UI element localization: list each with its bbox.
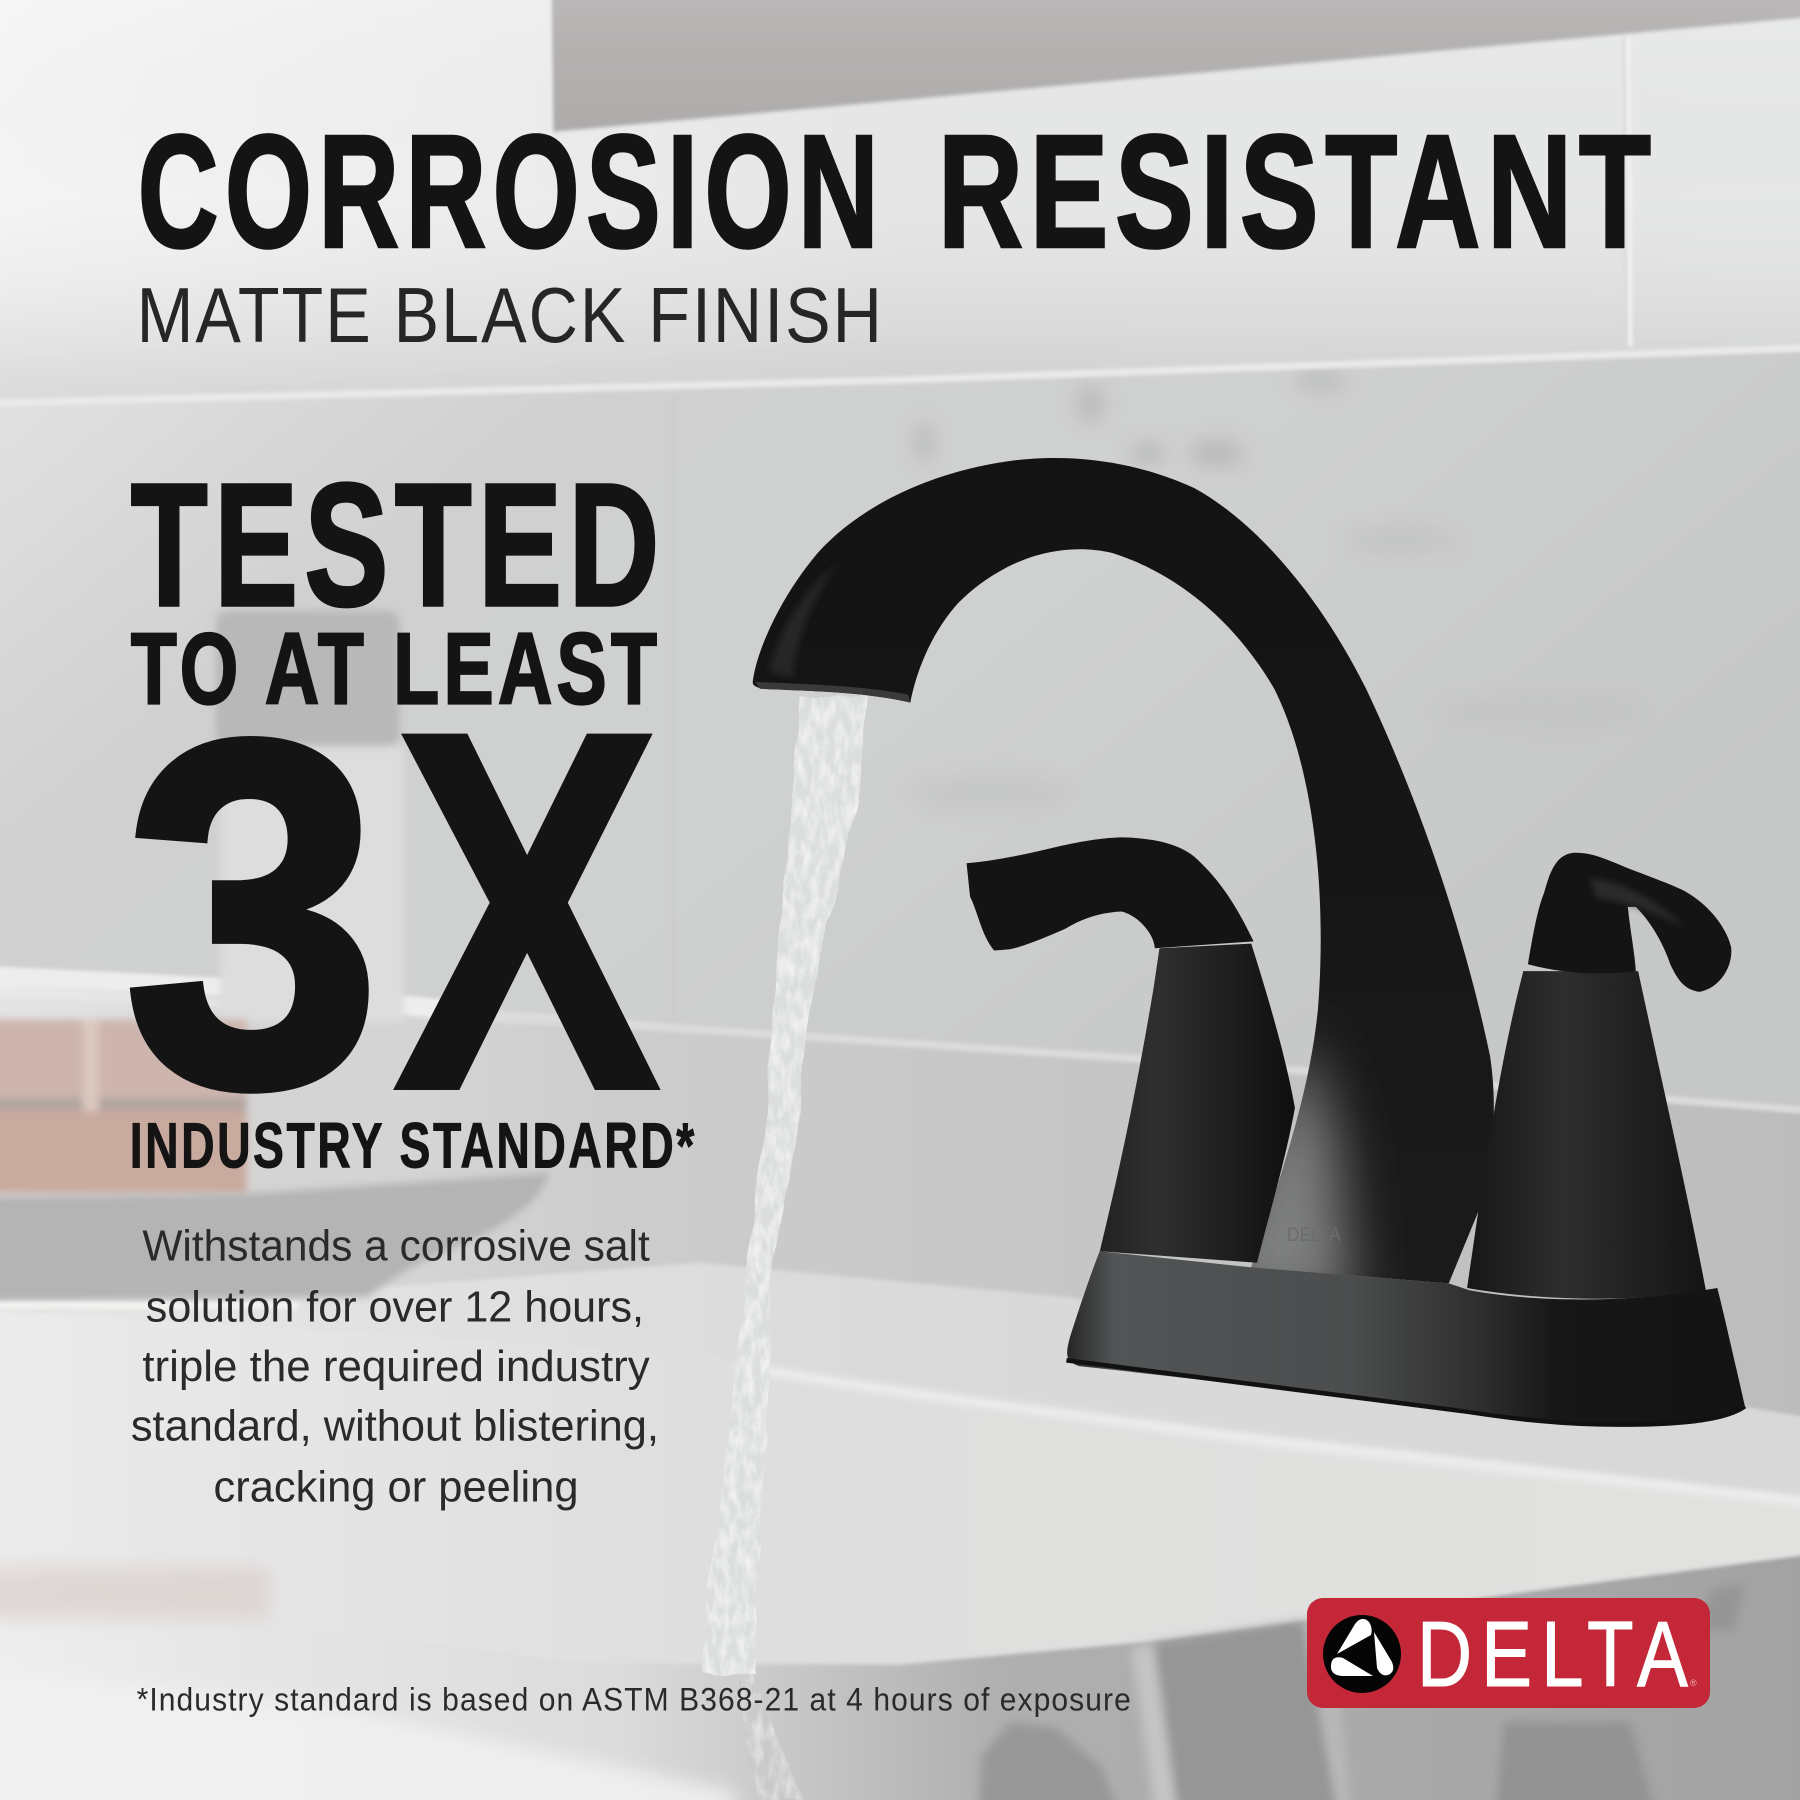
blurred pink reflection bbox=[0, 1567, 270, 1619]
right handle bbox=[1528, 853, 1731, 992]
sink deck bbox=[0, 1263, 1800, 1515]
middle wall tile bbox=[0, 347, 1800, 1114]
claim: tested to at least 3X industry standard bbox=[124, 447, 697, 1196]
reflections below the sink bbox=[976, 1584, 1745, 1800]
spout tip sheen bbox=[769, 562, 838, 677]
lower wall tile bbox=[0, 993, 1800, 1446]
TESTED: TESTED bbox=[131, 447, 666, 642]
faucet spout bbox=[753, 458, 1494, 1283]
body text: Withstands a corrosive salt bbox=[142, 1222, 650, 1270]
sink highlight edge bbox=[735, 1366, 1800, 1506]
sink front bbox=[0, 1309, 1800, 1665]
deck plate bbox=[1067, 1251, 1745, 1423]
wall shelf bbox=[551, 0, 1800, 132]
3X: 3 bbox=[124, 640, 381, 1189]
wordmark: DELTA bbox=[1417, 1602, 1697, 1706]
subtitle: MATTE BLACK FINISH bbox=[137, 271, 884, 359]
INDUSTRY STANDARD: INDUSTRY STANDARD* bbox=[130, 1109, 697, 1181]
title: CORROSION bbox=[138, 103, 885, 282]
body text: standard, without blistering, bbox=[131, 1403, 659, 1451]
faucet outlet bbox=[755, 682, 910, 703]
space under the sink bbox=[0, 1550, 1800, 1800]
lower pale ledge bbox=[0, 1665, 735, 1800]
faucet brand mark: DELTA bbox=[1287, 1224, 1341, 1246]
blurred red jar bbox=[0, 1019, 247, 1194]
tile grout lines bbox=[0, 37, 1800, 1114]
footnote: *Industry standard is based on ASTM B368-21 at 4 hours of exposure bbox=[137, 1681, 1132, 1717]
3X bbox=[124, 627, 662, 1196]
icon: Delta triangle mark bbox=[1323, 1615, 1401, 1693]
body text: triple the required industry bbox=[142, 1343, 650, 1391]
3X: X bbox=[394, 627, 662, 1196]
dish foot highlight bbox=[0, 1302, 298, 1309]
TO AT LEAST: TO AT LEAST bbox=[131, 614, 661, 726]
blurred bottle on counter bbox=[216, 611, 404, 1194]
marble veining bbox=[907, 372, 1642, 810]
left handle bbox=[967, 837, 1254, 951]
faucet bbox=[753, 458, 1745, 1425]
left cone bbox=[1100, 944, 1295, 1263]
body text: cracking or peeling bbox=[214, 1464, 579, 1512]
upper wall tile bbox=[0, 0, 1800, 404]
logo: Delta bbox=[1307, 1598, 1710, 1708]
spout lower highlight bbox=[1252, 1030, 1384, 1278]
handle sheen bbox=[1590, 878, 1688, 930]
blurred dish bbox=[0, 1173, 549, 1302]
right cone bbox=[1467, 971, 1706, 1299]
body text bbox=[131, 1222, 659, 1512]
registered mark: ® bbox=[1690, 1678, 1697, 1688]
water stream bbox=[703, 697, 869, 1800]
deck plate gasket bbox=[1066, 1360, 1745, 1425]
body text: solution for over 12 hours, bbox=[146, 1283, 644, 1331]
